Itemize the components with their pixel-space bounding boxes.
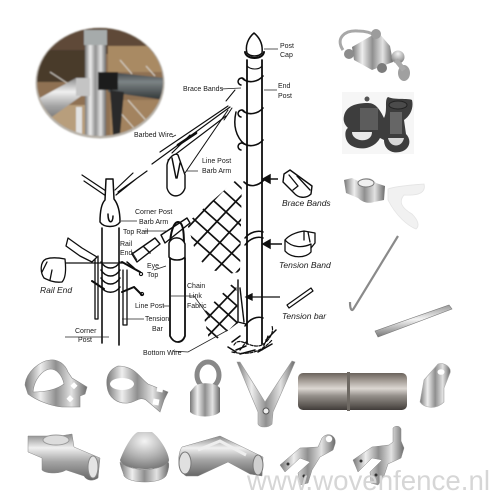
part: dark cast fitting — [342, 92, 414, 154]
diagram labels: Brace Bands — [183, 86, 224, 93]
diagram labels: Chain — [187, 283, 205, 290]
part: flat tension bar — [375, 305, 452, 337]
arrow to brace band — [263, 175, 278, 183]
diagram labels: Eye — [147, 263, 159, 270]
diagram labels: Link — [189, 293, 202, 300]
tension bar icon — [287, 288, 313, 308]
diagram labels: Corner — [75, 328, 97, 335]
arrow to tension bar — [246, 294, 280, 300]
end post with cap and brace bands — [224, 33, 273, 353]
diagram labels: Barb Arm — [202, 168, 231, 175]
gravel at post base — [228, 330, 276, 354]
part: barb arm v — [237, 361, 295, 427]
diagram labels: Rail — [120, 241, 133, 248]
part: tension band — [107, 366, 168, 412]
arrow to tension band — [263, 240, 282, 248]
diagram labels: Post — [280, 43, 294, 50]
chain link fabric upper — [188, 181, 242, 274]
diagram labels: Tension bar — [282, 311, 327, 321]
diagram labels: Post — [78, 337, 92, 344]
tension band icon — [285, 231, 315, 257]
part: hinge strap with eye — [280, 435, 335, 485]
diagram labels: Fabric — [187, 303, 207, 310]
part: dome post cap — [120, 432, 169, 482]
part: small eye cap — [420, 364, 450, 407]
brace bands icon — [283, 170, 312, 197]
top rail and line post with eye top — [127, 218, 190, 342]
diagram labels: Top Rail — [123, 229, 149, 236]
diagram labels: Brace Bands — [282, 198, 331, 208]
diagram labels: Line Post — [135, 303, 164, 310]
diagram labels: Tension Band — [279, 260, 331, 270]
diagram labels: End — [278, 83, 291, 90]
part: t fitting — [28, 434, 100, 480]
part: brace band with white strap — [344, 178, 424, 229]
corner post with barb arm and tension bars — [66, 179, 144, 345]
top wire v arms — [82, 171, 147, 196]
diagram labels: Rail End — [40, 285, 72, 295]
diagram labels: Bar — [152, 326, 164, 333]
line post barb arm — [167, 110, 228, 196]
diagram labels: Barb Arm — [139, 219, 168, 226]
diagram labels — [40, 43, 331, 357]
part: elbow fitting — [179, 436, 263, 476]
leader lines — [65, 49, 278, 352]
diagram labels: Barbed Wire — [134, 132, 173, 139]
diagram labels: Tension — [145, 316, 169, 323]
part: eye top — [190, 362, 220, 416]
diagram labels: Cap — [280, 52, 293, 59]
diagram labels: Post — [278, 93, 292, 100]
diagram labels: Bottom Wire — [143, 350, 182, 357]
part: metal sleeve cylinder — [298, 372, 407, 411]
part: hook bolt — [350, 236, 398, 310]
part: clamp band — [25, 360, 87, 407]
watermark: www.wovenfence.nl — [246, 465, 490, 496]
diagram labels: Corner Post — [135, 209, 172, 216]
rail end icon — [41, 258, 66, 282]
diagram labels: Line Post — [202, 158, 231, 165]
chain link fabric lower — [204, 284, 238, 338]
diagram labels: End — [120, 250, 133, 257]
barbed wire — [152, 106, 230, 164]
part: gate hinge with ball — [340, 29, 410, 81]
part: hinge strap with pin — [353, 426, 404, 485]
photo: installed fence post fitting — [36, 28, 166, 140]
diagram labels: Top — [147, 272, 158, 279]
pointer line from rail end — [66, 262, 123, 264]
